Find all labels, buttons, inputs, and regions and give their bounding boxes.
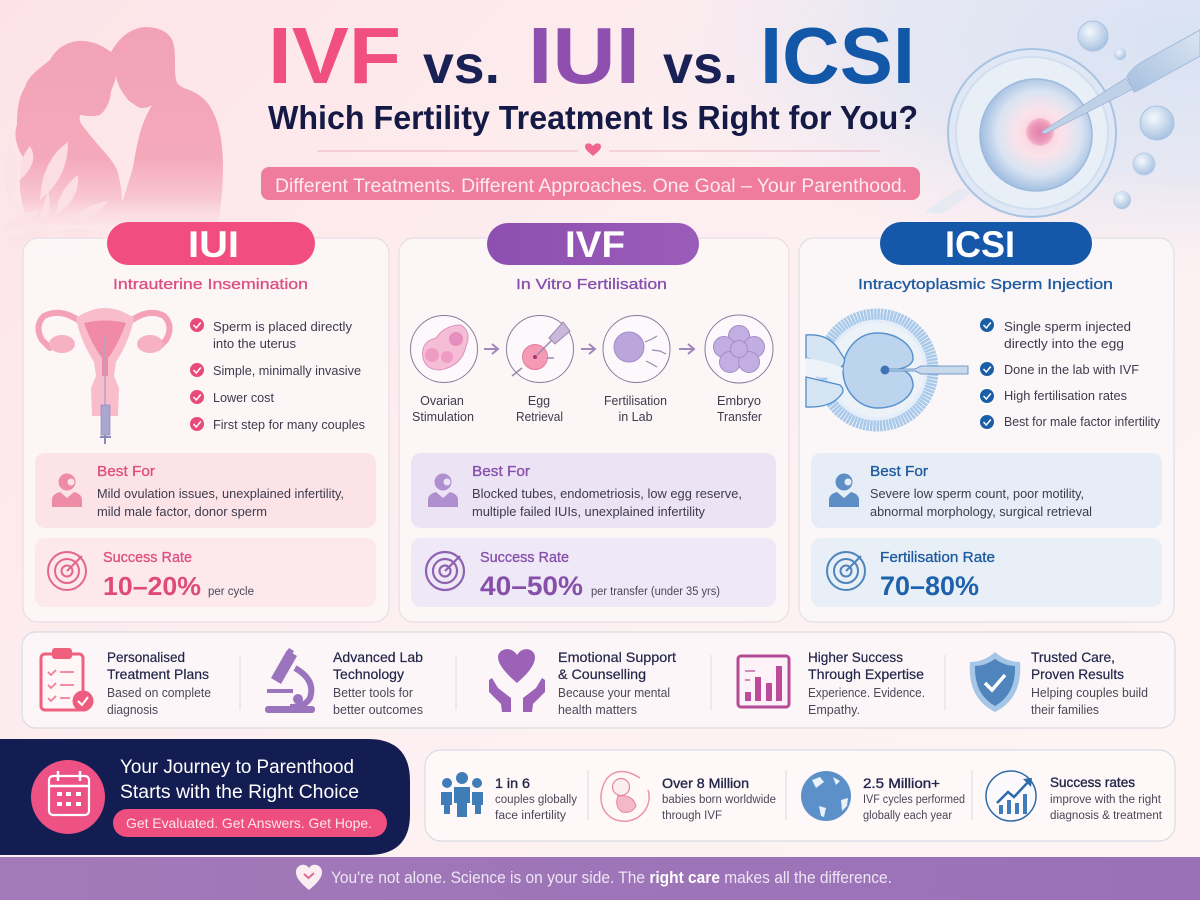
couple silhouette illustration <box>0 27 223 257</box>
IVF full name: In Vitro Fertilisation <box>516 276 667 293</box>
IUI full name: Intrauterine Insemination <box>113 276 308 293</box>
IVF header pill: IVF <box>565 224 625 265</box>
stat: success rates improve <box>986 771 1163 822</box>
panel: global statistics <box>425 750 1175 841</box>
feature: personalised plans <box>41 648 211 717</box>
feature: personalised plans: Personalised <box>107 649 185 665</box>
IUI benefits list <box>190 318 365 432</box>
ICSI benefits list: High fertilisation rates <box>1004 388 1127 403</box>
title: vs. <box>423 35 500 95</box>
feature: higher success: Experience. Evidence. <box>808 686 925 700</box>
ICSI best for box <box>811 453 1162 528</box>
IUI benefits list: into the uterus <box>213 336 296 351</box>
banner heading: Starts with the Right Choice <box>120 782 359 803</box>
IVF process steps <box>410 315 773 424</box>
feature: emotional support: Emotional Support <box>558 649 676 665</box>
stat: 2.5 million cycles: 2.5 Million+ <box>863 775 940 791</box>
feature: advanced lab: Advanced Lab <box>333 649 423 665</box>
IUI success rate box: 10–20% <box>103 571 201 601</box>
IUI best for box: Best For <box>97 463 155 480</box>
IVF success rate box <box>411 538 776 607</box>
tagline pill: Different Treatments. Different Approaches. One Goal – Your Parenthood. <box>275 175 907 197</box>
stat: 2.5 million cycles <box>801 771 965 822</box>
title: vs. <box>663 35 738 95</box>
ICSI full name: Intracytoplasmic Sperm Injection <box>858 276 1113 293</box>
ICSI best for box: abnormal morphology, surgical retrieval <box>870 504 1092 519</box>
feature: higher success: Empathy. <box>808 703 860 717</box>
stat: 8 million babies: Over 8 Million <box>662 775 749 791</box>
feature: higher success: Higher Success <box>808 649 903 665</box>
ICSI benefits list <box>980 318 1160 429</box>
IUI benefits list: Simple, minimally invasive <box>213 363 361 378</box>
feature: trusted care: Helping couples build <box>1031 686 1148 700</box>
title: ICSI <box>760 11 915 100</box>
arrow <box>484 344 498 354</box>
IUI header pill <box>107 222 315 265</box>
footer band <box>0 857 1200 900</box>
stat: 1 in 6: face infertility <box>495 810 566 822</box>
IVF best for box: Best For <box>472 463 530 480</box>
IUI success rate box <box>35 538 376 607</box>
IUI success rate box: per cycle <box>208 586 254 598</box>
panel: IVF <box>399 223 789 622</box>
IUI best for box: Mild ovulation issues, unexplained infertility, <box>97 486 344 501</box>
stat: 1 in 6: couples globally <box>495 794 577 806</box>
feature: higher success: Through Expertise <box>808 666 924 682</box>
feature: personalised plans: diagnosis <box>107 703 158 717</box>
icon: calendar <box>31 760 105 834</box>
banner heading <box>120 757 359 803</box>
feature: advanced lab: better outcomes <box>333 703 423 717</box>
panel: why choose features strip <box>22 632 1175 728</box>
stat: 1 in 6 <box>441 772 577 822</box>
step: fertilisation in lab <box>603 316 670 424</box>
step: fertilisation in lab: Fertilisation <box>604 394 667 408</box>
feature: advanced lab: Better tools for <box>333 686 413 700</box>
IUI header pill: IUI <box>188 224 239 265</box>
step: embryo transfer: Embryo <box>717 394 761 408</box>
footer message: You're not alone. Science is on your side. The right care makes all the difference. <box>331 868 892 887</box>
icon: uterus with catheter <box>38 308 170 444</box>
ICSI benefits list: Single sperm injected <box>1004 319 1131 334</box>
step: ovarian stimulation <box>410 316 478 424</box>
ICSI header pill <box>880 222 1092 265</box>
stat: success rates improve: Success rates <box>1050 774 1135 790</box>
heart divider <box>317 143 880 156</box>
step: embryo transfer: Transfer <box>717 410 762 424</box>
subtitle: Which Fertility Treatment Is Right for You? <box>268 99 918 136</box>
stat: 8 million babies: through IVF <box>662 810 722 822</box>
title: IUI <box>528 11 640 100</box>
feature: trusted care: Proven Results <box>1031 666 1124 682</box>
IUI benefits list: Lower cost <box>213 390 274 405</box>
ICSI benefits list: Best for male factor infertility <box>1004 414 1160 429</box>
IVF best for box <box>411 453 776 528</box>
feature: personalised plans: Treatment Plans <box>107 666 209 682</box>
feature: trusted care: their families <box>1031 703 1099 717</box>
IUI success rate box: Success Rate <box>103 549 192 566</box>
stat: success rates improve: improve with the right <box>1050 794 1162 806</box>
IVF success rate box: 40–50% <box>480 571 583 601</box>
feature: advanced lab <box>265 648 423 717</box>
banner heading: Your Journey to Parenthood <box>120 757 354 778</box>
stat: success rates improve: diagnosis & treatment <box>1050 810 1163 822</box>
arrow <box>679 344 694 354</box>
feature: advanced lab: Technology <box>333 666 404 682</box>
stat: 2.5 million cycles: IVF cycles performed <box>863 794 965 806</box>
feature: emotional support: Because your mental <box>558 686 670 700</box>
IVF header pill <box>487 223 699 265</box>
ICSI fertilisation rate box <box>811 538 1162 607</box>
IUI benefits list: Sperm is placed directly <box>213 319 353 334</box>
feature: trusted care <box>970 649 1148 717</box>
feature: emotional support <box>489 649 676 717</box>
icon: heart <box>296 865 322 890</box>
ICSI fertilisation rate box: Fertilisation Rate <box>880 549 995 566</box>
ICSI fertilisation rate box: 70–80% <box>880 571 979 601</box>
IVF best for box: Blocked tubes, endometriosis, low egg reserve, <box>472 486 742 501</box>
leaves <box>0 142 107 257</box>
ICSI benefits list: directly into the egg <box>1004 336 1124 351</box>
feature: emotional support: & Counselling <box>558 666 646 682</box>
call to action banner <box>0 739 410 855</box>
step: ovarian stimulation: Stimulation <box>412 410 474 424</box>
feature: trusted care: Trusted Care, <box>1031 649 1115 665</box>
tagline pill <box>261 167 920 200</box>
title <box>268 11 915 100</box>
egg injection illustration <box>925 21 1200 217</box>
title: IVF <box>268 11 401 100</box>
panel: IUI <box>23 222 389 622</box>
stat: 2.5 million cycles: globally each year <box>863 810 952 822</box>
banner pill: Get Evaluated. Get Answers. Get Hope. <box>126 815 372 831</box>
step: egg retrieval: Egg <box>528 394 550 408</box>
panel: ICSI <box>799 222 1174 622</box>
step: ovarian stimulation: Ovarian <box>420 394 464 408</box>
stat: 8 million babies: babies born worldwide <box>662 794 776 806</box>
ICSI best for box: Severe low sperm count, poor motility, <box>870 486 1084 501</box>
arrow <box>581 344 595 354</box>
IUI best for box <box>35 453 376 528</box>
feature: personalised plans: Based on complete <box>107 686 211 700</box>
ICSI benefits list: Done in the lab with IVF <box>1004 362 1139 377</box>
feature: emotional support: health matters <box>558 703 637 717</box>
step: egg retrieval <box>506 316 574 424</box>
icon: sperm injection into egg <box>806 314 968 426</box>
ICSI header pill: ICSI <box>945 224 1015 265</box>
step: fertilisation in lab: in Lab <box>618 410 653 424</box>
stat: 8 million babies <box>601 772 776 822</box>
step: embryo transfer <box>705 315 773 424</box>
IVF success rate box: per transfer (under 35 yrs) <box>591 586 720 598</box>
IVF success rate box: Success Rate <box>480 549 569 566</box>
ICSI best for box: Best For <box>870 463 928 480</box>
stat: 1 in 6: 1 in 6 <box>495 775 530 791</box>
IUI benefits list: First step for many couples <box>213 417 365 432</box>
feature: higher success <box>738 649 925 717</box>
IUI best for box: mild male factor, donor sperm <box>97 504 267 519</box>
IVF best for box: multiple failed IUIs, unexplained infertility <box>472 504 705 519</box>
banner pill <box>113 809 387 837</box>
step: egg retrieval: Retrieval <box>516 410 563 424</box>
